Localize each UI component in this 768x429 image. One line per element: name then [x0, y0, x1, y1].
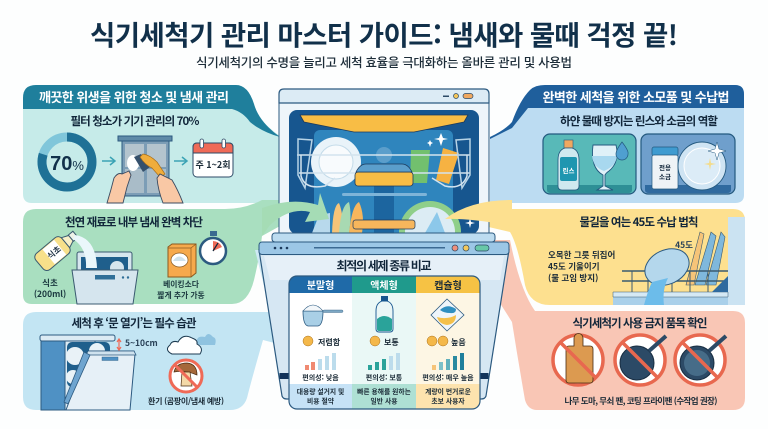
icon: no cast iron pan — [615, 335, 666, 385]
icon: scoop — [303, 305, 343, 326]
icon: vinegar bottle — [33, 226, 97, 273]
panel header: 깨끗한 위생을 위한 청소 및 냄새 관리 — [39, 87, 229, 106]
icon: angled plates — [686, 232, 725, 285]
icon: baking soda box — [168, 244, 196, 277]
arrow — [174, 157, 187, 165]
arrow — [102, 157, 115, 165]
icon: dishwasher — [72, 252, 138, 304]
lower plates — [312, 202, 363, 233]
open door with detergent comparison — [259, 242, 509, 409]
convenience: 편의성: 보통 — [366, 373, 403, 383]
vinegar label: (200ml) — [34, 288, 66, 300]
door hinge band — [272, 233, 495, 242]
column: capsule — [416, 276, 480, 409]
door shell — [259, 250, 509, 399]
column: liquid — [352, 276, 416, 409]
icon: glass — [592, 145, 617, 190]
icon: salt container: 소금 — [659, 171, 671, 181]
door top band — [259, 242, 509, 254]
icon: liquid bottle — [376, 296, 393, 332]
door bracket marks — [280, 373, 488, 379]
instructions: 오목한 그릇 뒤집어 — [548, 249, 615, 261]
heading: 천연 재료로 내부 냄새 완벽 차단 — [65, 214, 203, 230]
icon: timer — [200, 231, 226, 264]
table outline — [289, 276, 480, 409]
arrow: green swoosh — [262, 193, 329, 236]
icon: calendar: 주 1~2회 — [195, 158, 231, 171]
recommended use: 계량이 번거로운 — [425, 386, 471, 396]
panel: natural ingredients — [23, 200, 280, 304]
central dishwasher — [272, 89, 495, 263]
title: 식기세척기 관리 마스터 가이드: 냄새와 물때 걱정 끝! — [90, 13, 678, 53]
instructions: (물 고임 방지) — [548, 272, 598, 284]
icon: capsule — [431, 299, 464, 331]
gap indicator 5~10cm: 5~10cm — [125, 337, 158, 349]
door shine — [264, 256, 504, 280]
recommended use — [352, 384, 416, 409]
icon: upside-down bowl — [639, 242, 695, 292]
plate in rack — [311, 137, 361, 187]
recommended use — [416, 384, 480, 409]
panel: cleaning and odor — [23, 85, 280, 203]
rack handle — [355, 172, 413, 186]
card: rinse aid — [543, 134, 636, 194]
icon: shining plate — [678, 142, 726, 190]
subtitle: 식기세척기의 수명을 늘리고 세척 효율을 극대화하는 올바른 관리 및 사용법 — [196, 52, 572, 71]
bars — [432, 353, 464, 370]
card: dishwasher salt — [641, 134, 735, 194]
icon: no cutting board — [553, 334, 603, 385]
panel header — [490, 85, 744, 139]
recommended use: 일반 사용 — [371, 396, 397, 406]
cost: 저렴함 — [318, 337, 341, 348]
icon: no mushroom — [170, 360, 202, 392]
column: powder — [289, 276, 352, 409]
column: liquid: 액체형 — [370, 277, 398, 292]
panel: consumables and loading — [490, 85, 744, 203]
icon: no coated frying pan — [675, 335, 726, 385]
lower handle — [353, 220, 415, 229]
donut chart 70% — [42, 137, 92, 187]
icon: calendar — [193, 139, 233, 177]
heading: 식기세척기 사용 금지 품목 확인 — [572, 315, 708, 331]
icon: water streams — [644, 278, 668, 305]
cost: 보통 — [384, 337, 399, 348]
panel: open door habit — [23, 250, 290, 410]
ventilation label: 환기 (곰팡이/냄새 예방) — [148, 396, 224, 407]
panel header — [23, 85, 280, 137]
caption: 나무 도마, 무쇠 팬, 코팅 프라이팬 (수작업 권장) — [564, 395, 718, 407]
blue strip — [728, 217, 745, 305]
panel header: 완벽한 세척을 위한 소모품 및 수납법 — [542, 87, 730, 106]
icon: filter being brushed — [107, 136, 183, 203]
vinegar label: 식초 — [42, 277, 58, 289]
angle label: 45도 — [675, 239, 693, 251]
icon: clouds — [167, 334, 216, 354]
column: capsule: 캡슐형 — [434, 277, 462, 292]
donut chart 70%: 70% — [50, 153, 84, 175]
icon: open dishwasher — [40, 335, 136, 410]
heading: 물길을 여는 45도 수납 법칙 — [580, 214, 698, 230]
sparkles — [427, 133, 448, 147]
bars — [305, 353, 336, 370]
green cup — [410, 150, 430, 183]
comparison heading: 최적의 세제 종류 비교 — [336, 257, 432, 274]
baking soda label: 짧게 추가 가동 — [157, 290, 205, 301]
orange cup — [436, 148, 459, 184]
icon: water drop — [616, 142, 628, 160]
icon: vinegar bottle: 식초 — [45, 243, 64, 262]
arrow: yellow swoosh — [445, 200, 512, 226]
comparison table — [289, 276, 480, 409]
top spray bar — [300, 115, 468, 132]
cavity — [289, 110, 479, 234]
recommended use: 초보 사용자 — [431, 396, 465, 406]
dishwasher body — [279, 89, 489, 239]
lower bowl — [399, 201, 461, 263]
rinse heading: 하얀 물때 방지는 린스와 소금의 역할 — [560, 113, 718, 129]
cost: 높음 — [451, 337, 466, 348]
panel: prohibited items — [490, 240, 745, 410]
upper rack — [297, 139, 470, 188]
column: powder: 분말형 — [307, 277, 334, 292]
icon: salt container — [652, 147, 678, 189]
star — [465, 218, 475, 228]
panel: 45 degree loading — [440, 200, 745, 305]
convenience: 편의성: 낮음 — [302, 373, 339, 383]
icon: salt container: 전용 — [659, 162, 671, 172]
baking soda label: 베이킹소다 — [163, 279, 199, 290]
icon: rinse bottle: 린스 — [563, 165, 574, 175]
instructions: 45도 기울이기 — [548, 260, 600, 272]
recommended use: 빠른 용해를 원하는 — [357, 386, 411, 396]
control strip — [279, 89, 489, 103]
recommended use: 비용 절약 — [307, 396, 335, 406]
convenience: 편의성: 매우 높음 — [422, 373, 474, 383]
recommended use: 대용량 설거지 및 — [297, 386, 344, 396]
recommended use — [289, 384, 352, 409]
filter heading: 필터 청소가 기기 관리의 70% — [70, 113, 200, 129]
bars — [368, 353, 400, 370]
icon: rack and tray — [613, 271, 728, 305]
heading: 세척 후 ‘문 열기’는 필수 습관 — [72, 315, 197, 331]
